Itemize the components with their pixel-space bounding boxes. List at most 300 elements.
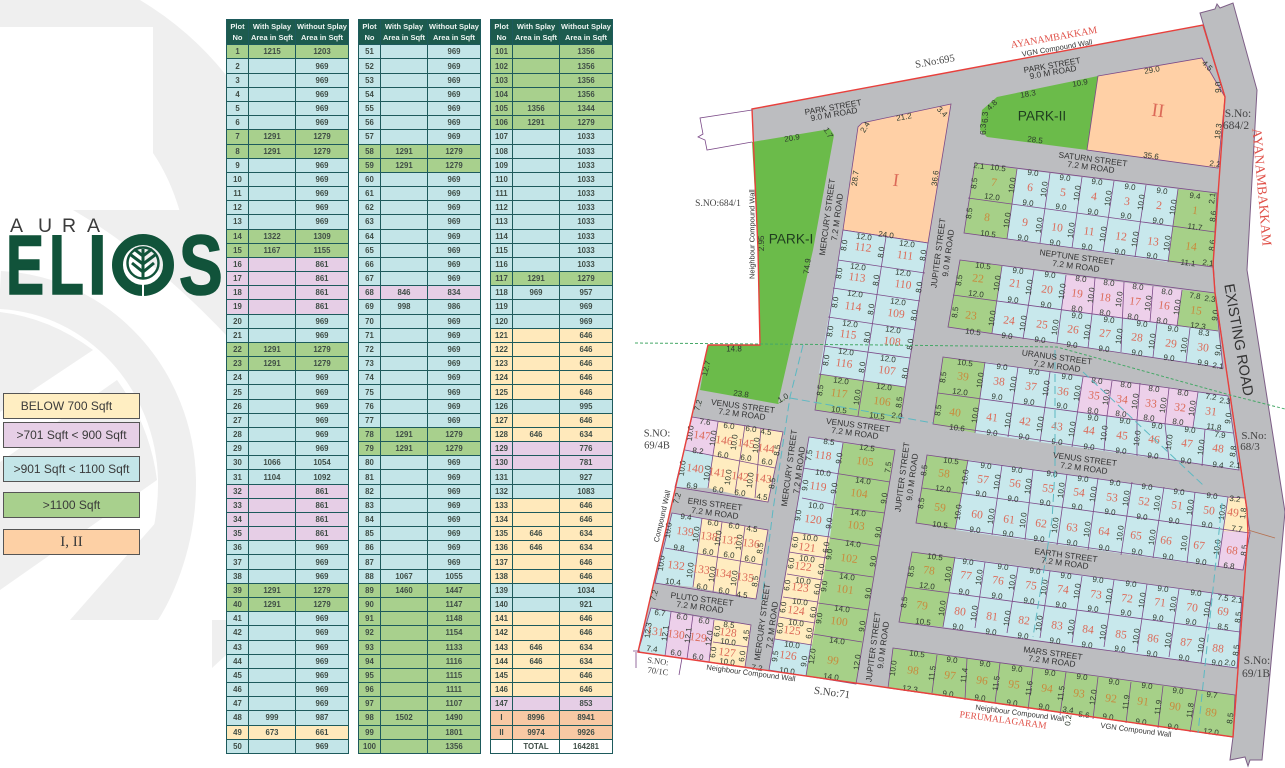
table: plots 1 to 50 <box>226 19 349 754</box>
table: plots 1 to 50: 1 <box>235 47 240 56</box>
plots 127 to 131 block: 130 <box>667 628 686 642</box>
plots 89 to 98 block: 11.5 <box>991 675 1002 691</box>
plots 31 to 48 block: 8.0 <box>1091 376 1104 386</box>
plots 49 to 68 block: 10.0 <box>1056 481 1067 499</box>
table: plots 101 to 147 and totals: 129 <box>495 444 508 453</box>
plots 89 to 98 block: 3.4 <box>1062 705 1075 715</box>
plots 15 to 30 block: 10.5 <box>965 326 982 338</box>
table: plots 1 to 50: 1291 <box>263 132 281 141</box>
plots 127 to 131 block: 4.5 <box>741 629 751 641</box>
plots 69 to 88 block: 9.0 <box>985 627 998 637</box>
plots 31 to 48 block: 44 <box>1083 424 1096 438</box>
plots 140 to 147 block: 6.0 <box>723 421 736 431</box>
table: plots 51 to 100: 97 <box>365 699 374 708</box>
park II <box>979 76 1102 150</box>
table: plots 1 to 50: 969 <box>315 203 328 212</box>
table: plots 1 to 50: 861 <box>315 288 328 297</box>
table: plots 1 to 50: 969 <box>315 388 328 396</box>
plots 89 to 98 block: 94 <box>1041 682 1054 696</box>
table: plots 1 to 50: 999 <box>265 713 278 722</box>
plots 89 to 98 block: 91 <box>1137 695 1150 709</box>
table: plots 101 to 147 and totals: 646 <box>579 628 592 637</box>
plots 69 to 88 block: 77 <box>960 569 973 583</box>
table: plots 1 to 50: 1167 <box>264 246 280 255</box>
plots 99 to 105 and 118 to 126 block: 122 <box>794 560 813 574</box>
table: plots 1 to 50: 1155 <box>314 246 330 255</box>
plots 106 to 117 block: 114 <box>844 300 862 314</box>
plots 15 to 30 block: 8.0 <box>1156 316 1169 326</box>
table: plots 101 to 147 and totals: 140 <box>495 600 508 609</box>
table: plots 101 to 147 and totals: 124 <box>495 373 508 382</box>
plots 1 to 14 block: 10.0 <box>1098 225 1109 243</box>
legend: I, II: I, II <box>60 534 83 550</box>
plots 89 to 98 block: 9.0 <box>1135 717 1148 727</box>
plots 89 to 98 block: 89 <box>1205 706 1218 720</box>
plots 89 to 98 block: 9.0 <box>979 659 992 669</box>
table: plots 1 to 50: 969 <box>315 430 328 439</box>
table: plots 1 to 50: 12 <box>233 203 242 212</box>
table: plots 1 to 50: 969 <box>315 175 328 184</box>
plots 89 to 98 block: 9.0 <box>1108 677 1121 687</box>
table: plots 1 to 50: 969 <box>315 118 328 127</box>
plots 31 to 48 block: 46 <box>1148 433 1161 447</box>
plots 69 to 88 block: 8.5 <box>1231 644 1241 656</box>
survey number labels: S.No:695 <box>914 53 956 71</box>
table: plots 51 to 100: 77 <box>365 416 374 425</box>
table: plots 51 to 100: 98 <box>365 713 374 722</box>
table: plots 101 to 147 and totals: 1356 <box>577 90 595 99</box>
plots 99 to 105 and 118 to 126 block: 6.0 <box>782 579 792 591</box>
plots 31 to 48 block: 8.0 <box>1143 413 1156 423</box>
plots 89 to 98 block: 9.0 <box>1044 668 1057 678</box>
plots 69 to 88 block: 9.0 <box>1023 596 1036 606</box>
plots 1 to 14 block: 9.0 <box>1091 177 1104 187</box>
table: plots 101 to 147 and totals: 131 <box>495 473 508 482</box>
plots 89 to 98 block: 12.3 <box>902 683 919 695</box>
plots 69 to 88 block: 9.0 <box>1190 588 1203 598</box>
plots 1 to 14 block: 6 <box>1026 182 1034 194</box>
table: plots 51 to 100: 1279 <box>445 430 463 439</box>
plots 99 to 105 and 118 to 126 block: 9.0 <box>857 620 867 632</box>
plots 31 to 48 block: 9.0 <box>1119 416 1132 426</box>
plots 49 to 68 block: 9.0 <box>1131 547 1144 557</box>
plots 99 to 105 and 118 to 126 block: 126 <box>779 649 798 663</box>
plots 132 to 139 block: 6.0 <box>718 586 731 596</box>
plots 15 to 30 block: 12.3 <box>1190 320 1207 332</box>
plots 89 to 98 block: 11.9 <box>1121 694 1132 710</box>
plots 15 to 30 block: 10.0 <box>1143 294 1154 312</box>
plots 15 to 30 block: 17 <box>1129 295 1142 309</box>
table: plots 101 to 147 and totals: 146 <box>495 685 508 694</box>
plots 1 to 14 block: 9.0 <box>1059 173 1072 183</box>
table: plots 101 to 147 and totals: 114 <box>495 232 508 241</box>
street labels: 9.0 M ROAD <box>940 229 956 277</box>
table: plots 1 to 50: 31 <box>233 473 242 482</box>
plots 69 to 88 block: 10.0 <box>1137 591 1148 609</box>
plots 127 to 131 block <box>638 608 764 673</box>
plots 106 to 117 block: 108 <box>883 335 902 349</box>
plots 31 to 48 block: 45 <box>1116 429 1129 443</box>
plots 31 to 48 block: 2.3 <box>1219 396 1232 406</box>
plots 106 to 117 block: 12.0 <box>856 231 873 243</box>
table: plots 1 to 50: 861 <box>315 529 328 538</box>
plots 15 to 30 block: 8.0 <box>1103 278 1116 288</box>
street labels: 9.0 M ROAD <box>1029 63 1077 81</box>
table: plots 51 to 100: 1116 <box>446 657 462 666</box>
plot II <box>1087 58 1225 169</box>
plots 1 to 14 block: 11 <box>1083 225 1096 239</box>
plots 31 to 48 block: 10.0 <box>1196 438 1207 456</box>
table: plots 1 to 50: 1279 <box>313 132 331 141</box>
table: plots 51 to 100: 969 <box>447 416 460 425</box>
legend: 901 to 1100 <box>3 456 140 482</box>
table: plots 51 to 100: 969 <box>447 232 460 241</box>
plots 69 to 88 block: 10.0 <box>1039 578 1050 596</box>
plots 31 to 48 block: 9.0 <box>991 392 1004 402</box>
plots 31 to 48 block: 10.0 <box>1164 433 1175 451</box>
plots 127 to 131 block: 7.2 <box>751 663 764 673</box>
plots 49 to 68 block: 55 <box>1042 482 1055 496</box>
table: plots 1 to 50: 1203 <box>313 47 331 56</box>
plots 49 to 68 block: 9.0 <box>1136 512 1149 522</box>
plots 69 to 88 block: 80 <box>954 605 967 619</box>
plots 132 to 139 block: 10.0 <box>713 529 724 547</box>
plots 1 to 14 block: 9.0 <box>1027 168 1040 178</box>
table: plots 1 to 50: 861 <box>315 501 328 510</box>
plots 69 to 88 block: 78 <box>923 564 936 578</box>
plots 106 to 117 block: 12.0 <box>833 375 850 387</box>
table: plots 51 to 100: 1502 <box>395 713 413 722</box>
plots 49 to 68 block: 63 <box>1066 521 1079 535</box>
plots 31 to 48 block: 32 <box>1174 401 1187 415</box>
plots 106 to 117 block: 8.5 <box>894 396 904 408</box>
table: plots 1 to 50: 18 <box>233 288 242 297</box>
table: plots 1 to 50: 9 <box>235 161 240 170</box>
street labels: 7.2 M ROAD <box>1028 653 1076 669</box>
plots 69 to 88 block: 84 <box>1082 623 1095 637</box>
table: plots 101 to 147 and totals: 969 <box>579 317 592 326</box>
street labels: 7.2 M ROAD <box>829 193 845 241</box>
plots 15 to 30 block: 8.0 <box>1127 312 1140 322</box>
plots 69 to 88 block: 10.0 <box>1002 609 1013 627</box>
table: plots 51 to 100: 969 <box>447 62 460 71</box>
plots 140 to 147 block: 10.0 <box>677 459 688 477</box>
plots 1 to 14 block: 7 <box>990 177 998 189</box>
table: plots 51 to 100: 75 <box>365 388 374 396</box>
park I <box>700 126 835 405</box>
plots 15 to 30 block: 9.0 <box>1163 353 1176 363</box>
table: plots 51 to 100: 85 <box>365 529 374 538</box>
plots 140 to 147 block: 143 <box>754 472 773 486</box>
table: plots 51 to 100: 1460 <box>395 586 413 595</box>
plots 106 to 117 block: 110 <box>894 278 912 292</box>
table: plots 1 to 50: 969 <box>315 189 328 198</box>
plots 69 to 88 block: 10.0 <box>1168 595 1179 613</box>
plots 31 to 48 block: 10.0 <box>1132 429 1143 447</box>
table: plots 51 to 100: 56 <box>365 118 374 127</box>
table: plots 51 to 100: 1067 <box>395 572 413 581</box>
plots 127 to 131 block: 129 <box>689 631 708 645</box>
plots 31 to 48 block: 2.1 <box>1229 460 1242 470</box>
plots 89 to 98 block: 12.0 <box>1203 726 1220 738</box>
plots 1 to 14 block: 10.0 <box>1002 211 1013 229</box>
park I: PARK-I <box>769 232 813 246</box>
table: plots 1 to 50: Area in Sqft <box>301 33 343 42</box>
table: plots 51 to 100: 969 <box>447 359 460 368</box>
table: plots 51 to 100: 66 <box>365 260 374 269</box>
table: plots 1 to 50: 8 <box>235 147 240 156</box>
table: plots 1 to 50: 14 <box>233 232 242 241</box>
plots 15 to 30 block: 10.0 <box>1172 298 1183 316</box>
plots 69 to 88 block: 9.0 <box>997 562 1010 572</box>
plots 69 to 88 block: 10.0 <box>969 604 980 622</box>
plots 31 to 48 block: 9.0 <box>1151 421 1164 431</box>
plots 132 to 139 block: 136 <box>742 537 761 551</box>
plots 99 to 105 and 118 to 126 block <box>769 437 895 684</box>
table: plots 101 to 147 and totals: 147 <box>495 699 508 708</box>
table: plots 51 to 100: 90 <box>365 600 374 609</box>
table: plots 1 to 50: 969 <box>315 742 328 751</box>
plots 69 to 88 block: 79 <box>916 599 929 613</box>
plots 15 to 30 block: 9.9 <box>1197 358 1210 368</box>
plots 127 to 131 block: 12.0 <box>704 629 715 647</box>
table: plots 51 to 100: 969 <box>447 47 460 56</box>
plots 99 to 105 and 118 to 126 block: 9.0 <box>793 509 803 521</box>
plots 89 to 98 block: 5.6 <box>1078 710 1091 720</box>
table: plots 101 to 147 and totals: Plot <box>494 22 509 31</box>
plots 132 to 139 block: 132 <box>667 559 686 573</box>
table: plots 51 to 100: 89 <box>365 586 374 595</box>
plots 49 to 68 block: 10.0 <box>1179 534 1190 552</box>
table: plots 1 to 50: 15 <box>233 246 242 255</box>
table: plots 51 to 100: 54 <box>365 90 374 99</box>
village and wall labels: 7.2 <box>648 588 660 602</box>
plot I: 2.4 <box>858 120 872 134</box>
plots 15 to 30 block: 9.0 <box>1098 344 1111 354</box>
plots 99 to 105 and 118 to 126 block: 99 <box>827 654 840 668</box>
plots 69 to 88 block: 9.0 <box>1055 600 1068 610</box>
plots 99 to 105 and 118 to 126 block: 10.0 <box>792 596 809 608</box>
plots 15 to 30 block: 10.5 <box>975 260 992 272</box>
plots 99 to 105 and 118 to 126 block: 118 <box>814 449 832 463</box>
plots 31 to 48 block: 10.0 <box>1035 415 1046 433</box>
plots 49 to 68 block: 9.0 <box>1071 502 1084 512</box>
survey number labels: S.No: <box>1244 655 1270 667</box>
street labels: JUPITER STREET <box>863 612 883 682</box>
plots 69 to 88 block: 9.0 <box>1120 608 1133 618</box>
table: plots 1 to 50: 1092 <box>313 473 331 482</box>
plot I: 21.2 <box>896 111 913 123</box>
plots 49 to 68 block: 10.0 <box>1023 477 1034 495</box>
survey number labels: S.NO: <box>647 655 669 667</box>
plots 99 to 105 and 118 to 126 block: 7.5 <box>883 461 893 473</box>
street labels <box>670 55 1128 682</box>
plots 69 to 88 block: 10.0 <box>1034 614 1045 632</box>
table: plots 51 to 100: 64 <box>365 232 374 241</box>
plots 1 to 14 block: 8.6 <box>1208 210 1218 222</box>
plots 49 to 68 block: 9.0 <box>1109 478 1122 488</box>
plots 106 to 117 block: 8.0 <box>862 331 872 343</box>
park I: 1.7 <box>821 126 835 140</box>
table: plots 101 to 147 and totals: 116 <box>495 260 508 269</box>
plots 69 to 88 block: 9.0 <box>1017 631 1030 641</box>
plots 49 to 68 block: 61 <box>1003 513 1016 527</box>
plots 31 to 48 block: 9.0 <box>1115 446 1128 456</box>
table: plots 1 to 50: 1279 <box>313 586 331 595</box>
plots 31 to 48 block: 8.0 <box>1172 417 1185 427</box>
table: plots 51 to 100: 60 <box>365 175 374 184</box>
table: plots 101 to 147 and totals: 1291 <box>527 274 545 283</box>
table: plots 101 to 147 and totals: 110 <box>495 175 508 184</box>
table: plots 1 to 50: 48 <box>233 713 242 722</box>
plots 89 to 98 block: 11.6 <box>1024 680 1035 696</box>
table: plots 51 to 100: 969 <box>447 473 460 482</box>
table: plots 1 to 50: 969 <box>315 628 328 637</box>
plots 106 to 117 block: 8.0 <box>839 239 849 251</box>
plots 127 to 131 block: 10.0 <box>719 656 736 668</box>
plots 99 to 105 and 118 to 126 block: 6.0 <box>775 622 785 634</box>
village and wall labels: Neighbour Compound Wall <box>748 189 757 279</box>
park II: 10.9 <box>1072 77 1089 89</box>
plots 49 to 68 block: 9.0 <box>1007 494 1020 504</box>
plots 1 to 14 block: 9.0 <box>1124 182 1137 192</box>
plots 49 to 68 block: 68 <box>1226 544 1239 558</box>
table: plots 51 to 100: 986 <box>447 302 460 311</box>
table: plots 1 to 50: 42 <box>233 628 242 637</box>
plots 31 to 48 block: 41 <box>986 411 999 425</box>
plots 49 to 68 block: 59 <box>934 501 947 515</box>
table: plots 51 to 100: 59 <box>365 161 374 170</box>
plots 140 to 147 block: 142 <box>731 470 750 484</box>
street labels: 7.2 M ROAD <box>791 446 807 494</box>
plots 1 to 14 block: 14 <box>1185 240 1198 254</box>
plots 99 to 105 and 118 to 126 block: 14.0 <box>850 507 867 519</box>
plots 106 to 117 block: 12.0 <box>890 296 907 308</box>
plots 127 to 131 block: 128 <box>719 626 738 640</box>
plots 127 to 131 block: 10.0 <box>720 636 737 648</box>
table: plots 101 to 147 and totals: 957 <box>579 288 592 297</box>
survey number labels <box>644 53 1270 701</box>
plots 106 to 117 block: 116 <box>835 357 853 371</box>
plots 127 to 131 block: 8.5 <box>723 620 736 630</box>
plots 1 to 14 block: 11.7 <box>1187 222 1204 232</box>
plots 89 to 98 block: 10.0 <box>888 659 899 677</box>
plots 106 to 117 block: 12.0 <box>838 346 855 358</box>
plots 69 to 88 block: 81 <box>986 610 999 624</box>
table: plots 1 to 50: 1291 <box>263 345 281 354</box>
table: plots 51 to 100: 1133 <box>446 643 462 652</box>
table: plots 51 to 100: 834 <box>447 288 460 297</box>
plots 89 to 98 block: 9.0 <box>1011 664 1024 674</box>
plots 15 to 30 block: 15 <box>1190 304 1203 318</box>
table: plots 51 to 100: 969 <box>447 501 460 510</box>
plots 15 to 30 block: 8.0 <box>1075 274 1088 284</box>
plots 49 to 68 block: 52 <box>1138 495 1151 509</box>
plots 132 to 139 block: 6.0 <box>728 521 741 531</box>
table: plots 101 to 147 and totals: 122 <box>495 345 508 354</box>
survey number labels: 69/4B <box>644 440 670 452</box>
plots 49 to 68 block: 10.0 <box>1185 498 1196 516</box>
plots 31 to 48 block: 9.0 <box>1223 412 1233 424</box>
plots 69 to 88 block: 8.5 <box>1217 622 1230 632</box>
plots 132 to 139 block: 6.0 <box>702 547 715 557</box>
table: plots 1 to 50: 17 <box>233 274 242 283</box>
plots 127 to 131 block: 6.0 <box>692 652 705 662</box>
street labels: 9.0 M ROAD <box>810 105 858 123</box>
plots 1 to 14 block: 10.0 <box>1168 198 1179 216</box>
plots 31 to 48 block: 10.0 <box>1099 424 1110 442</box>
table: plots 101 to 147 and totals: 141 <box>495 614 508 623</box>
table: plots 1 to 50: 969 <box>315 373 328 382</box>
plots 140 to 147 block: 141 <box>708 466 727 480</box>
plots 99 to 105 and 118 to 126 block: 9.5 <box>770 650 780 662</box>
plots 31 to 48 block: 9.0 <box>1147 451 1160 461</box>
plots 69 to 88 block: 10.0 <box>1104 587 1115 605</box>
table: plots 101 to 147 and totals: 8996 <box>527 713 545 722</box>
plots 132 to 139 block: 10.0 <box>691 525 702 543</box>
table: plots 101 to 147 and totals: 646 <box>579 388 592 396</box>
plots 106 to 117 block <box>815 229 928 423</box>
plots 106 to 117 block: 8.5 <box>815 384 825 396</box>
plots 99 to 105 and 118 to 126 block: 123 <box>791 581 810 595</box>
logo emblem: leaf in circle <box>118 240 168 297</box>
table: plots 51 to 100: 1291 <box>395 161 413 170</box>
plots 69 to 88 block: 10.0 <box>937 599 948 617</box>
plots 31 to 48 block: 9.0 <box>1184 425 1197 435</box>
table: plots 101 to 147 and totals: 118 <box>495 288 508 297</box>
plots 1 to 14 block: 9 <box>1021 217 1029 229</box>
plots 15 to 30 block: 9.0 <box>1040 300 1053 310</box>
plots 31 to 48 block: 8.0 <box>1148 384 1161 394</box>
table: plots 101 to 147 and totals: 646 <box>579 331 592 340</box>
table: plots 51 to 100 <box>358 19 481 754</box>
plots 1 to 14 block: 9.0 <box>1156 186 1169 196</box>
plots 89 to 98 block: 9.0 <box>1076 672 1089 682</box>
plots 89 to 98 block: 95 <box>1008 678 1021 692</box>
plots 49 to 68 block: 9.0 <box>1098 543 1111 553</box>
plots 140 to 147 block: 8.2 <box>692 446 705 456</box>
plots 69 to 88 block: 9.0 <box>1114 644 1127 654</box>
plots 15 to 30 block: 2.1 <box>1212 361 1225 371</box>
plots 89 to 98 block: 9.0 <box>974 693 987 703</box>
plots 106 to 117 block: 12.0 <box>847 288 864 300</box>
plots 106 to 117 block: 109 <box>887 307 906 321</box>
survey number labels: S.No: <box>1225 108 1251 120</box>
plots 1 to 14 block: 9.0 <box>1081 242 1094 252</box>
table: plots 101 to 147 and totals: 646 <box>579 671 592 680</box>
legend: I, II <box>3 529 140 555</box>
street labels: 7.2 M ROAD <box>831 425 879 441</box>
table: plots 101 to 147 and totals: 102 <box>495 62 508 71</box>
table: plots 101 to 147 and totals: 1356 <box>577 76 595 85</box>
plots 69 to 88 block: 9.0 <box>1081 640 1094 650</box>
park I: 74.9 <box>802 257 813 275</box>
plots 15 to 30 block: 19 <box>1071 287 1084 301</box>
plots 69 to 88 block: 85 <box>1115 628 1128 642</box>
table: plots 51 to 100: 1055 <box>445 572 463 581</box>
table: plots 1 to 50: 969 <box>315 331 328 340</box>
legend: below 700 <box>3 393 140 419</box>
table: plots 51 to 100: 71 <box>365 331 374 340</box>
plots 69 to 88 block: 10.0 <box>1196 636 1207 654</box>
table: plots 51 to 100: 92 <box>365 628 374 637</box>
table: plots 101 to 147 and totals: 101 <box>495 47 508 56</box>
table: plots 51 to 100: 969 <box>447 104 460 113</box>
table: plots 51 to 100: 78 <box>365 430 374 439</box>
plots 99 to 105 and 118 to 126 block: 124 <box>787 604 806 618</box>
table: plots 1 to 50: 1066 <box>263 458 281 467</box>
table: plots 51 to 100: 969 <box>447 458 460 467</box>
